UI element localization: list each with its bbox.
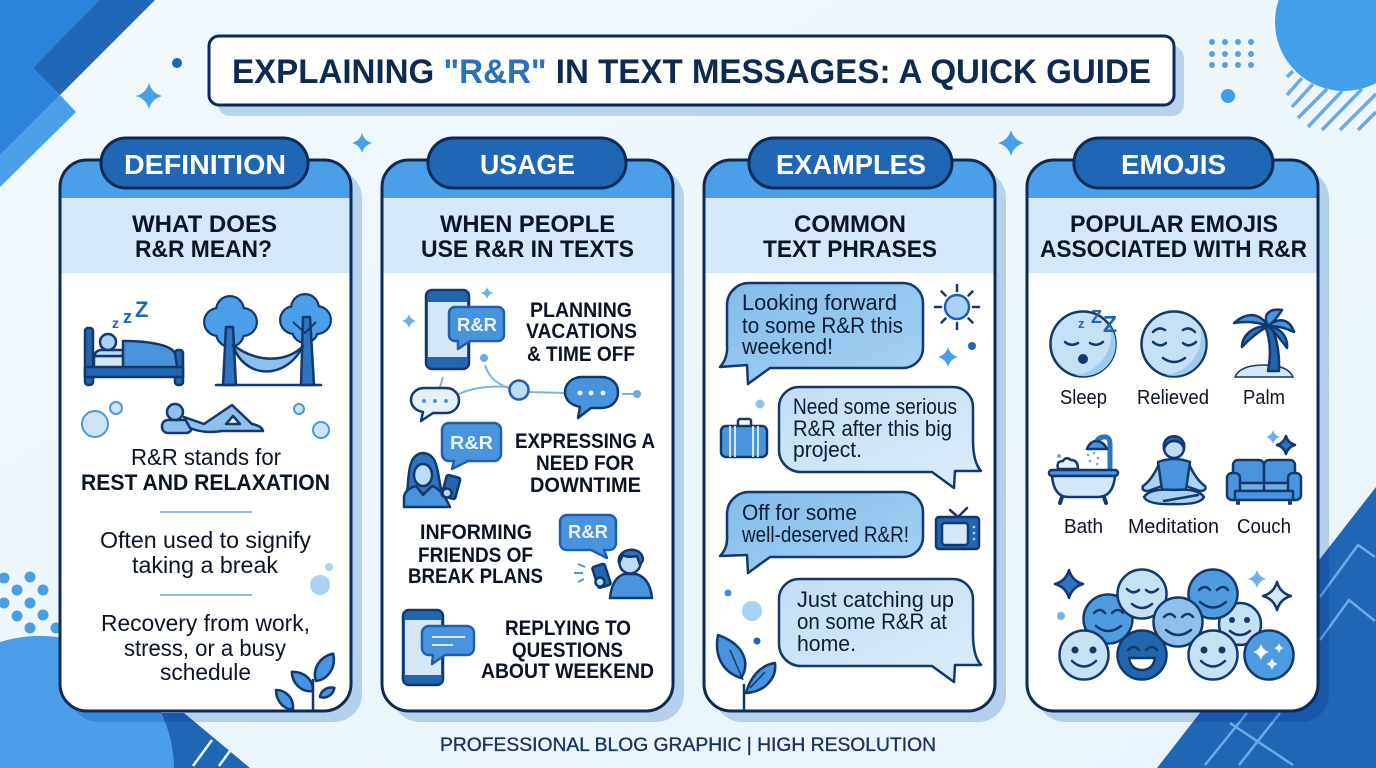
bubble: off for some: Off for some [742,500,857,525]
text: recovery: stress, or a busy [124,635,286,661]
text: planning vacations: VACATIONS [526,320,637,343]
tab: usage [428,138,626,188]
decoration: dots [724,590,762,644]
icon: connected chat bubbles [411,354,641,421]
icon: person sleeping in bed: z [112,315,119,331]
tab: emojis [1074,138,1273,188]
bubble: just catching up: on some R&R at [797,609,948,634]
tab: emojis: EMOJIS [1121,149,1226,180]
bubble: looking forward: to some R&R this [742,313,903,338]
bubble: looking forward [720,283,923,384]
emoji: palm tree [1234,310,1294,377]
icon: plant [276,650,339,709]
heading: what does R&R mean: WHAT DOES [132,211,277,238]
icon: woman with phone and R&R bubble [404,423,501,507]
icon: bubbles [82,402,329,438]
text: stands for [81,444,330,495]
decoration: top-left shapes [0,0,182,187]
emoji: sleep: Z [1103,311,1117,337]
label: bath: Bath [1064,516,1103,538]
heading: common text phrases: COMMON [794,211,906,238]
label: relieved: Relieved [1137,387,1209,409]
heading: popular emojis: POPULAR EMOJIS [1070,211,1278,238]
icon: person sleeping in bed: z [123,307,132,327]
label: sleep: Sleep [1060,387,1107,409]
emoji: couch [1227,460,1301,503]
text: taking a break [100,527,311,578]
footer: PROFESSIONAL BLOG GRAPHIC | HIGH RESOLUTION [440,735,936,756]
heading: common text phrases: TEXT PHRASES [763,236,937,263]
bubble: looking forward: weekend! [741,334,833,359]
icon: person sleeping in bed [85,297,183,385]
heading: popular emojis: ASSOCIATED WITH R&R [1040,236,1307,263]
icon: person lying down [162,404,263,433]
icon: sun [935,285,979,329]
label: couch: Couch [1237,516,1291,538]
text: stands for: REST AND RELAXATION [81,470,330,495]
text: planning vacations: PLANNING [530,299,632,322]
heading: common text phrases [763,211,937,263]
tab: usage: USAGE [480,149,575,180]
tab: definition: DEFINITION [124,149,286,180]
heading: what does R&R mean [132,211,277,263]
text: expressing a need: NEED FOR [536,452,634,475]
text: replying to questions: ABOUT WEEKEND [481,660,654,683]
text: replying to questions: QUESTIONS [512,639,623,662]
text: expressing a need [515,430,655,497]
emoji: sleep: z [1078,316,1085,331]
text: recovery: schedule [160,659,251,685]
icon: man with phone and R&R bubble [560,515,652,598]
text: expressing a need: EXPRESSING A [515,430,655,453]
decoration: sparkle and dot [938,342,976,367]
bubble: off for some [720,492,923,573]
label: meditation: Meditation [1128,516,1219,538]
decoration: couch sparkles [1266,430,1295,454]
text: replying to questions: REPLYING TO [505,617,631,640]
icon: suitcase [721,419,767,457]
emoji: face cluster [1055,570,1294,680]
heading: popular emojis [1040,211,1307,263]
emoji: relieved [1142,312,1206,376]
label: palm: Palm [1243,387,1285,409]
decoration: top-right shapes [1209,0,1376,130]
icon: woman with phone and R&R bubble: R&R [450,433,493,453]
icon: television [936,508,979,549]
tab: examples: EXAMPLES [776,149,926,180]
bubble: need some serious: Need some serious [793,394,957,419]
heading: when people use R&R: WHEN PEOPLE [440,211,615,238]
icon: small bubbles [310,563,333,595]
bubble: just catching up: Just catching up [797,587,954,612]
text: expressing a need: DOWNTIME [530,474,641,497]
bubble: need some serious: project. [793,437,862,462]
emoji: bath [1049,437,1118,503]
text: informing friends: BREAK PLANS [408,565,543,588]
emoji: meditation [1143,436,1205,504]
text: taking a break: taking a break [132,552,279,578]
tab: examples [749,138,952,188]
text: stands for: R&R stands for [131,444,281,470]
icon: plant [717,635,775,709]
decoration: bottom-left shapes [0,572,250,768]
text: taking a break: Often used to signify [100,527,311,553]
title box [209,36,1184,116]
panel: definition [60,138,362,722]
icon: phone with chat bubble [403,610,474,685]
text: recovery: Recovery from work, [101,610,310,636]
icon: hammock between trees [203,293,332,385]
icon: phone with R&R bubble [402,287,504,369]
bubble: need some serious: R&R after this big [793,416,952,441]
icon: man with phone and R&R bubble: R&R [568,522,608,542]
sparkle decorations [82,130,1024,596]
text: informing friends [408,521,543,588]
emoji: sleep: Z [1091,307,1102,327]
title: EXPLAINING "R&R" IN TEXT MESSAGES: A QUICK GUIDE [232,53,1151,91]
panel: examples [704,138,1006,722]
text: planning vacations [526,299,637,366]
bubble: need some serious [779,387,981,488]
text: informing friends: FRIENDS OF [418,544,533,567]
icon: phone with R&R bubble: R&R [457,315,497,335]
bubble: off for some: well-deserved R&R! [741,522,909,547]
heading: what does R&R mean: R&R MEAN? [135,236,272,263]
decoration: bottom-right shapes [1157,487,1376,768]
heading: when people use R&R [421,211,634,263]
panel: emojis [1027,138,1329,722]
text: replying to questions [481,617,654,683]
tab: definition [101,138,308,188]
text: informing friends: INFORMING [420,521,532,544]
text: planning vacations: & TIME OFF [527,343,635,366]
panel: usage [382,138,684,722]
bubble: just catching up: home. [797,631,856,656]
heading: when people use R&R: USE R&R IN TEXTS [421,236,634,263]
bubble: just catching up [779,579,981,682]
icon: person sleeping in bed: Z [135,297,148,322]
text: recovery [101,610,310,685]
emoji: sleep [1050,307,1117,376]
bubble: looking forward: Looking forward [742,290,897,315]
